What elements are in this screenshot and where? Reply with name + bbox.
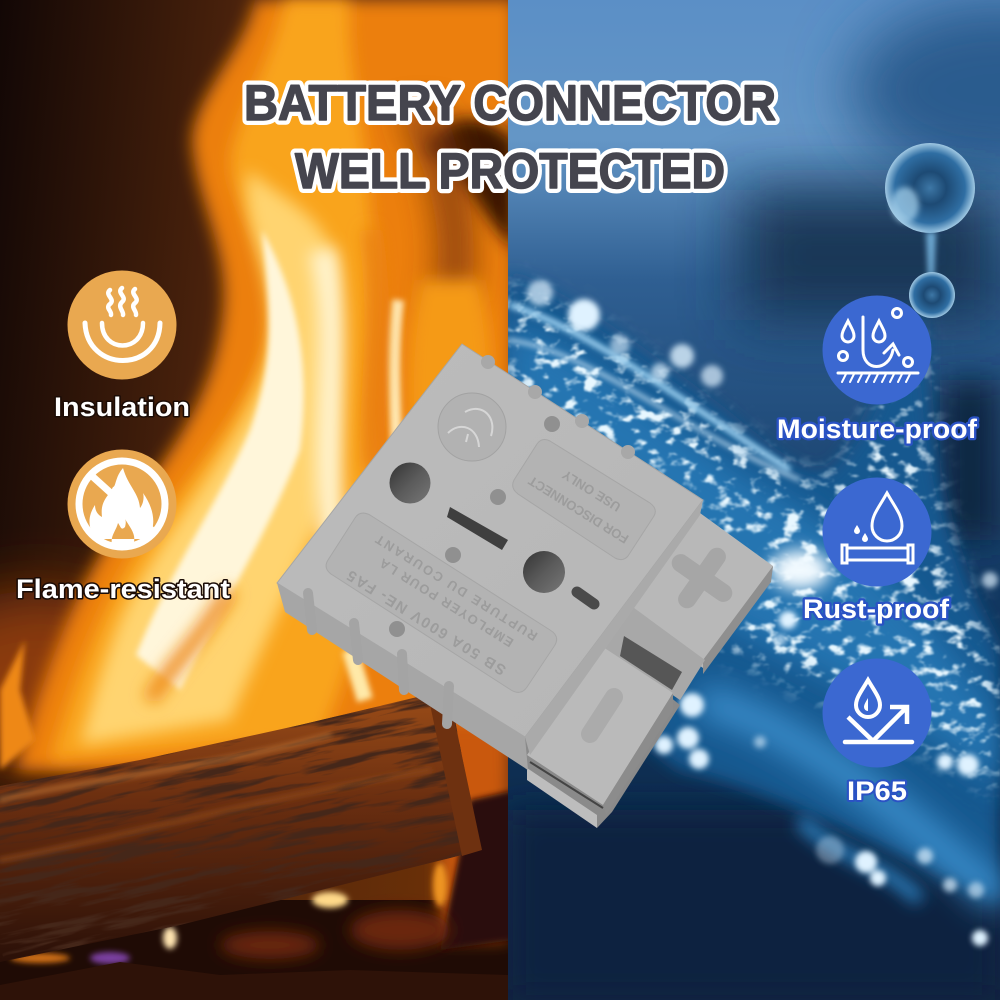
icon: IP65 [822, 658, 932, 768]
icon: flame-resistant [68, 450, 176, 558]
panel: fire background [0, 0, 558, 1000]
panel: rating plate [326, 513, 557, 692]
bottom slab [524, 640, 680, 828]
panel: for disconnect plate [513, 440, 655, 560]
title line 1: BATTERY CONNECTOR [244, 75, 776, 131]
panel: rating plate: EMPLOYER POUR LA [376, 555, 516, 650]
panel: for disconnect plate: USE ONLY [559, 467, 623, 515]
minus symbol [590, 697, 614, 734]
burning log [0, 697, 482, 962]
water droplets [885, 143, 975, 318]
panel: rating plate: RUPTURE DU COURANT [373, 532, 540, 644]
icon: rust-proof [822, 478, 932, 586]
top bumps [481, 355, 635, 459]
plus symbol [666, 542, 738, 614]
holes [389, 416, 594, 637]
connector [277, 344, 773, 828]
panel: rating plate: SB 50A 600V NE- FA5 [344, 566, 509, 678]
label: IP65: IP65 [847, 776, 907, 806]
flames [0, 0, 515, 780]
panel: water background [508, 0, 1000, 1000]
icon: insulation [68, 270, 176, 380]
water splash [508, 275, 1000, 900]
connector side wall [277, 583, 528, 770]
connector top face [277, 344, 703, 737]
title line 1: BATTERY CONNECTOR [244, 75, 776, 131]
plug gap [603, 605, 705, 700]
embers under log [0, 720, 515, 1000]
bokeh lights [527, 280, 998, 946]
ridges [308, 593, 449, 724]
housing: plus side [625, 513, 773, 674]
label: rust-proof: Rust-proof [803, 594, 950, 624]
title line 2: WELL PROTECTED [295, 143, 725, 199]
housing: minus side [527, 647, 673, 815]
icon: moisture-proof [822, 296, 932, 404]
label: moisture-proof: Moisture-proof [777, 414, 978, 444]
title line 2: WELL PROTECTED [295, 143, 725, 199]
logo [438, 393, 506, 461]
label: insulation: Insulation [54, 392, 190, 422]
label: flame-resistant: Flame-resistant [16, 574, 230, 604]
panel: for disconnect plate: FOR DISCONNECT [526, 473, 631, 547]
title [244, 75, 776, 199]
